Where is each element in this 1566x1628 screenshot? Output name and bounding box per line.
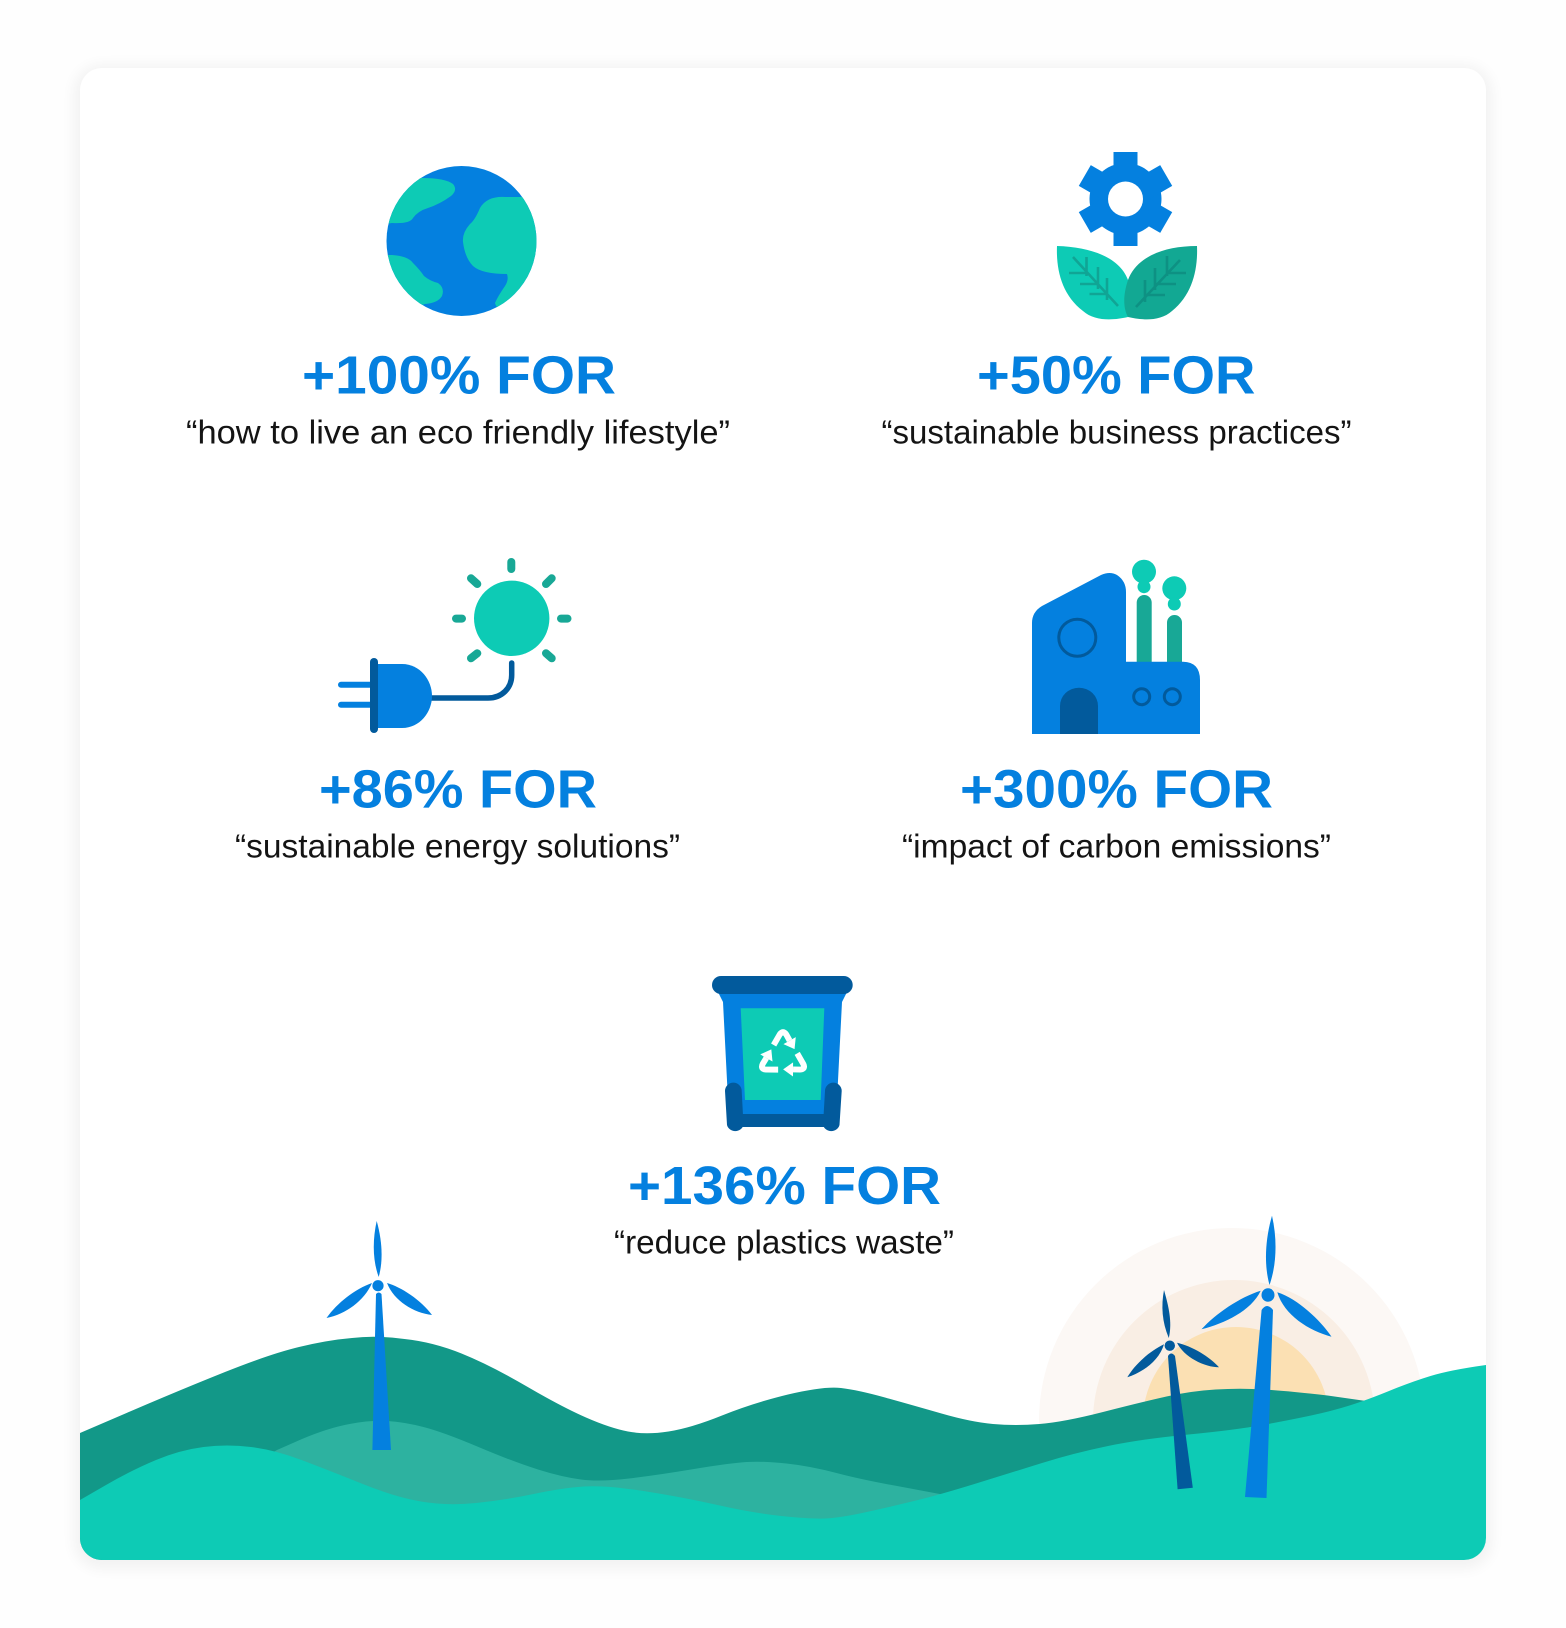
icon: recycling bin [712, 976, 853, 1131]
item: +86% [235, 562, 680, 864]
icon: globe [386, 166, 536, 316]
search phrase: “sustainable business practices” [882, 414, 1352, 450]
icon: recycling symbol [756, 1032, 808, 1079]
search phrase: “impact of carbon emissions” [902, 828, 1331, 864]
search phrase: “reduce plastics waste” [614, 1224, 954, 1260]
stat heading: +50% FOR [977, 346, 1256, 406]
landscape scene [80, 1216, 1486, 1560]
icon: gear and leaves [1057, 152, 1197, 319]
dark hill [80, 1337, 1380, 1560]
stat heading: +86% FOR [319, 760, 597, 820]
search phrase: “how to live an eco friendly lifestyle” [186, 414, 730, 450]
item: +50% [882, 152, 1352, 450]
search phrase: “sustainable energy solutions” [235, 828, 680, 864]
sun glow [1039, 1228, 1420, 1424]
middle hill [274, 1421, 940, 1518]
stat heading: +136% FOR [628, 1156, 941, 1216]
left wind turbine [326, 1221, 432, 1450]
stat heading: +300% FOR [960, 760, 1273, 820]
item: +100% [186, 166, 730, 450]
small right wind turbine [1127, 1290, 1219, 1489]
large right wind turbine [1202, 1216, 1332, 1498]
infographic artwork [80, 152, 1486, 1560]
front hill [80, 1365, 1486, 1560]
item: +136% [614, 976, 954, 1260]
icon: factory [1032, 560, 1200, 734]
icon: plug and sun [341, 562, 568, 729]
stat heading: +100% FOR [302, 346, 616, 406]
item: +300% [902, 560, 1331, 864]
